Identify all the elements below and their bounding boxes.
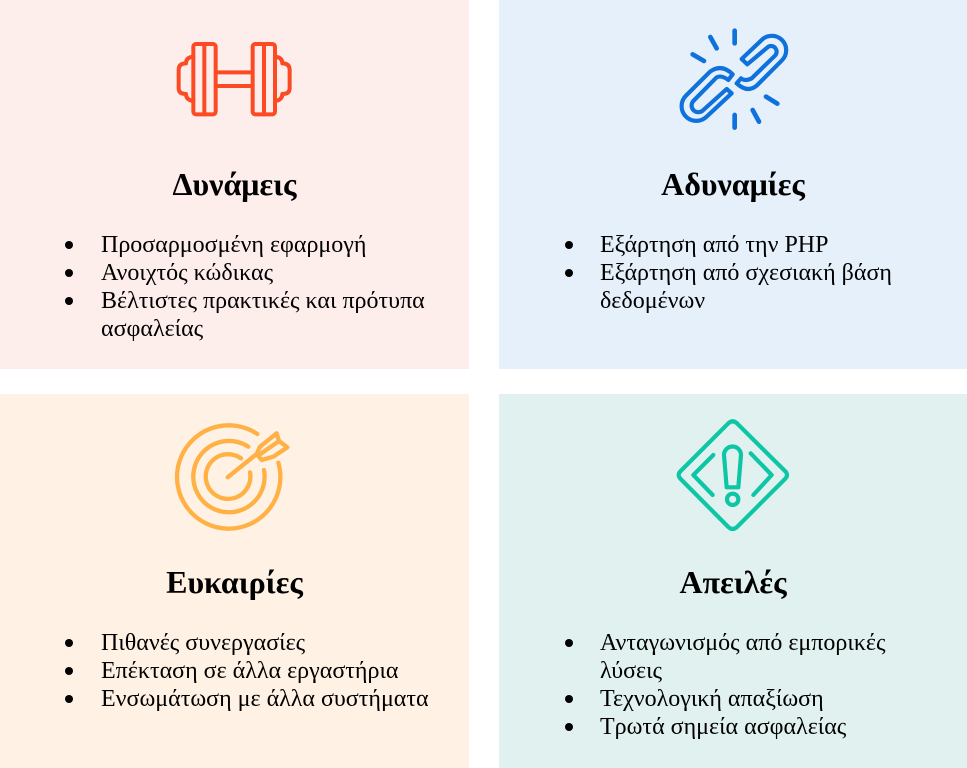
panel: weaknesses (499, 0, 967, 369)
heading: opportunities: Ευκαιρίες (166, 564, 303, 600)
icon: dumbbell (176, 42, 292, 116)
list: strengths: Βέλτιστες πρακτικές και πρότυπα (101, 288, 425, 314)
list: weaknesses (565, 232, 892, 314)
list: weaknesses: Εξάρτηση από την PHP (600, 232, 828, 258)
list: weaknesses: Εξάρτηση από σχεσιακή βάση (600, 260, 892, 286)
heading: weaknesses: Αδυναμίες (661, 166, 805, 202)
list: threats (565, 630, 886, 740)
list: threats: Τεχνολογική απαξίωση (600, 686, 824, 712)
list: threats: λύσεις (600, 658, 662, 684)
list: opportunities: Ενσωμάτωση με άλλα συστήματα (101, 686, 429, 712)
list: strengths: ασφαλείας (101, 316, 203, 342)
panel: threats (499, 394, 967, 768)
list: strengths (65, 232, 425, 342)
icon: broken link (680, 28, 788, 130)
panel: opportunities (0, 394, 469, 768)
list: threats: Ανταγωνισμός από εμπορικές (600, 630, 886, 656)
panel: strengths (0, 0, 469, 369)
heading: threats: Απειλές (679, 564, 787, 600)
list: strengths: Ανοιχτός κώδικας (101, 260, 273, 286)
icon: target with arrow (174, 423, 290, 531)
heading: strengths: Δυνάμεις (172, 166, 297, 202)
list: strengths: Προσαρμοσμένη εφαρμογή (101, 232, 366, 258)
icon: warning diamond (676, 419, 790, 532)
list: opportunities (65, 630, 429, 712)
list: opportunities: Επέκταση σε άλλα εργαστήρια (101, 658, 398, 684)
list: opportunities: Πιθανές συνεργασίες (101, 630, 305, 656)
list: weaknesses: δεδομένων (600, 288, 705, 314)
list: threats: Τρωτά σημεία ασφαλείας (600, 714, 846, 740)
